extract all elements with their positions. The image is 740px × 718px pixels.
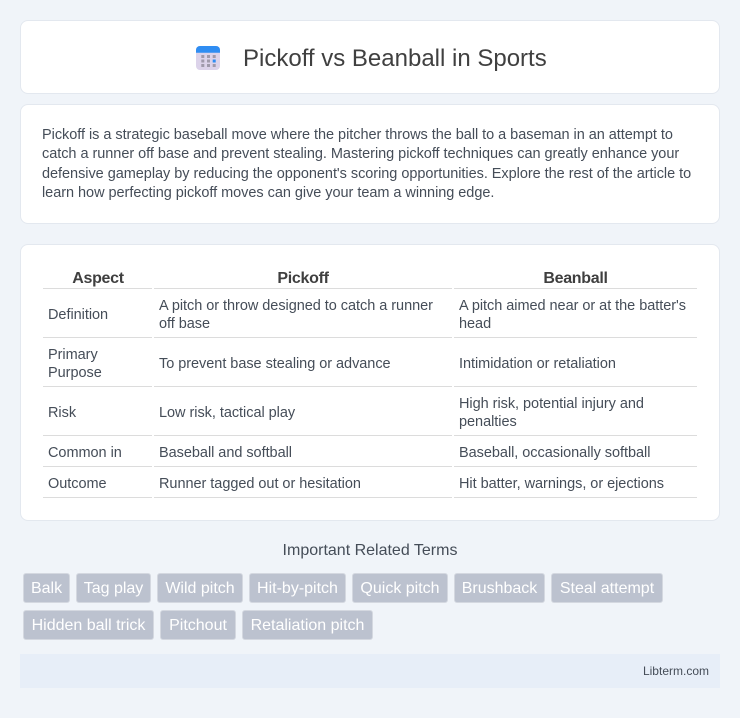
footer bar	[20, 654, 720, 688]
intro paragraph	[42, 127, 691, 201]
tag list: Steal attempt	[560, 580, 654, 597]
row: definition: off base	[159, 316, 210, 332]
row: outcome: Runner tagged out or hesitation	[159, 476, 361, 492]
intro paragraph: learn how perfecting pickoff moves can give your team a winning edge.	[42, 185, 494, 201]
table header: Aspect	[72, 270, 124, 287]
intro paragraph: Pickoff is a strategic baseball move where the pitcher throws the ball to a baseman in an attempt to	[42, 127, 673, 143]
row: primary purpose: To prevent base stealing or advance	[159, 356, 391, 372]
heading: important related terms: Important Related Terms	[283, 542, 457, 559]
row: definition: A pitch aimed near or at the batter's	[459, 298, 686, 314]
table header	[72, 270, 608, 287]
row: risk: Low risk, tactical play	[159, 405, 295, 421]
row: primary purpose: Intimidation or retaliation	[459, 356, 616, 372]
row: risk: penalties	[459, 414, 517, 430]
table header: Beanball	[543, 270, 608, 287]
table header: Pickoff	[277, 270, 329, 287]
row: common in: Baseball and softball	[159, 445, 292, 461]
tag list: Balk	[31, 580, 62, 597]
intro paragraph: defensive gameplay by reducing the opponent's scoring opportunities. Explore the rest of the article to	[42, 166, 691, 182]
tag list: Hit-by-pitch	[257, 580, 338, 597]
tag list: Wild pitch	[165, 580, 235, 597]
panel: title header	[20, 20, 720, 94]
tag list: Quick pitch	[360, 580, 440, 597]
row: definition: Definition	[48, 307, 108, 323]
tag list: Brushback	[462, 580, 537, 597]
row: outcome: Hit batter, warnings, or ejections	[459, 476, 664, 492]
row: definition: head	[459, 316, 491, 332]
row: definition	[48, 298, 686, 332]
row: risk: High risk, potential injury and	[459, 396, 644, 412]
row: common in: Common in	[48, 445, 122, 461]
footer credit: Libterm.com	[643, 664, 709, 678]
row: common in	[48, 445, 650, 461]
row: risk: Risk	[48, 405, 76, 421]
row: primary purpose: Primary	[48, 347, 98, 363]
panel: intro text	[20, 104, 720, 224]
row: definition: A pitch or throw designed to catch a runner	[159, 298, 433, 314]
tag list: Tag play	[84, 580, 143, 597]
tag list: Hidden ball trick	[32, 617, 145, 634]
tag list	[23, 573, 663, 640]
row: outcome: Outcome	[48, 476, 107, 492]
row: outcome	[48, 476, 664, 492]
row: common in: Baseball, occasionally softball	[459, 445, 650, 461]
icon: calendar	[196, 46, 220, 70]
panel: comparison table	[20, 244, 720, 521]
row: primary purpose	[48, 347, 616, 381]
tag list: Pitchout	[169, 617, 227, 634]
row: risk	[48, 396, 644, 430]
tag list: Retaliation pitch	[251, 617, 364, 634]
intro paragraph: catch a runner off base and prevent stealing. Mastering pickoff techniques can greatly enhance your	[42, 146, 679, 162]
row: primary purpose: Purpose	[48, 365, 102, 381]
title: Pickoff vs Beanball in Sports	[243, 45, 547, 72]
